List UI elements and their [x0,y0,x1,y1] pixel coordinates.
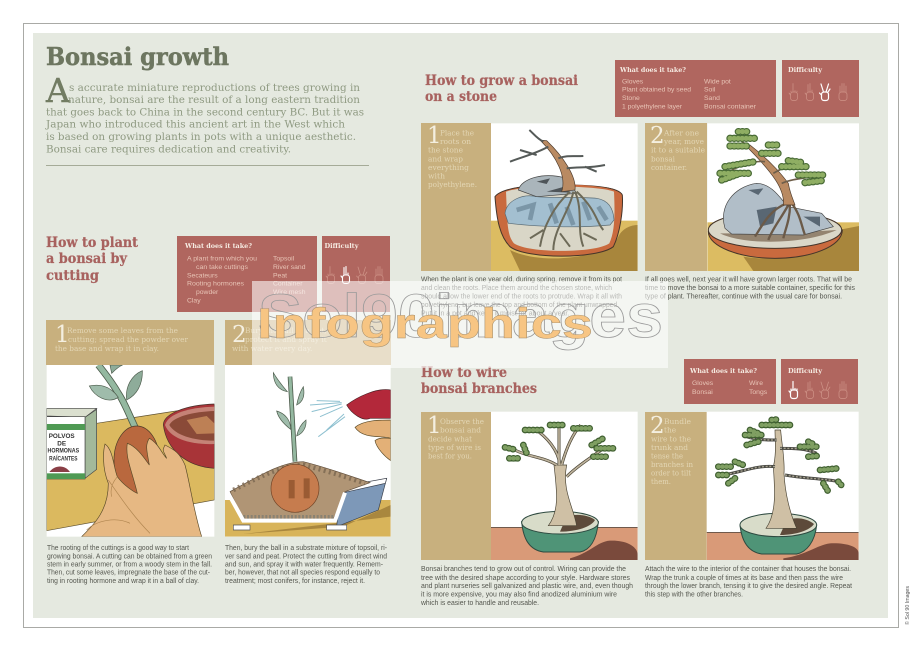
foliage [720,132,825,183]
step 1 caption, wire: decide what [428,434,472,443]
intro text block: is based on growing plants in pots with a unique aesthetic. [46,131,356,143]
powder box: POLVOS [49,433,75,440]
pot and soil [227,462,387,530]
trunk and branches [747,145,795,205]
clay ball [114,426,159,494]
step 2 caption, wire: 2 [650,413,665,439]
powder box [47,408,97,479]
body text: cutting step 2: treatment; most conifers, for instance, reject it. [225,578,365,585]
step 1 caption, wire: bonsai and [440,426,481,435]
panel: what does it take, stone [615,60,776,117]
step 2 caption, stone: year, move [663,137,704,146]
step 1 caption, stone: Place the [440,129,474,138]
illustration: hands wrapping cutting in clay [47,365,214,537]
image credit: © Sol 90 Images [904,585,911,625]
heading: how to plant [46,235,139,284]
panel: what does it take, stone: Sand [704,95,720,102]
body text: stone step 1 [421,277,622,317]
panel: what does it take, stone: Wide pot [704,78,731,85]
step 2 caption, cutting [225,320,391,365]
body text: wire step 2: through the lower branch, tensing it to give the desired angle. Repeat [645,583,852,590]
step 1 caption, stone: the stone [428,146,463,155]
body text: wire step 1 [420,566,633,607]
step 1 caption, wire: Observe the [440,417,484,426]
trunk and branches [540,140,575,192]
intro text block: s accurate miniature reproductions of trees growing in [69,82,360,94]
trunk [766,430,797,528]
panel: what does it take, stone: What does it take? [619,66,686,74]
buried clay ball [271,464,319,512]
watermark: Infographics [257,300,593,348]
panel: what does it take, wire: Bonsai [692,389,713,396]
panel: what does it take, cutting: Peat [273,272,287,279]
hands [82,438,202,537]
body text: stone step 2 [645,277,855,301]
intro text block: nature, bonsai are the result of a long eastern tradition [68,94,360,106]
step 2 caption, wire: Bundle [664,417,691,426]
body text: stone step 1: When the plant is one year old, during spring, remove it from its pot [421,277,622,284]
step 1 caption, cutting [46,320,214,365]
step 1 caption, stone: roots on [440,137,471,146]
heading: grow on a stone: How to grow a bonsai [425,73,578,89]
body text: stone step 1: Put it in a pot and keep it moist for about a year. [421,310,569,317]
step 1 caption, wire: 1 [427,413,442,439]
body text: stone step 2: time to move the bonsai to a more suitable container, specific for this [645,285,855,292]
body text: stone step 2: If all goes well, next year it will have grown larger roots. That will be [645,277,852,284]
step 2 caption, wire: tense the [651,452,683,461]
intro text block: Japan who introduced this ancient art in the West which [45,119,345,131]
step 2 caption, cutting: Bury the ball in a pot, [245,326,327,335]
heading: how to plant: a bonsai by [46,251,128,267]
illustration: planted cutting being sprayed [225,365,391,537]
intro text block [45,71,364,155]
step 2 caption, wire: them. [651,477,671,486]
roots [530,192,603,250]
body text: cutting step 1: Then, cut some leaves, impregnate the base of the cut- [47,570,211,577]
step 1 caption, cutting: Remove some leaves from the [67,326,178,335]
panel: what does it take, cutting: can take cuttings [196,264,249,271]
heading: grow on a stone [425,73,578,105]
step 2 caption, cutting: 2 [232,322,247,348]
step 2 caption, stone: bonsai [651,154,676,163]
stone [723,183,833,235]
panel: what does it take, cutting: Topsoil [273,256,295,263]
panel: what does it take, cutting: powder [196,289,219,296]
panel: what does it take, stone: Gloves [622,78,644,85]
powder box: DE [57,440,66,447]
body text: stone step 1: should allow the lower end of the roots to protrude. Wrap it all with [421,294,622,301]
powder box: HORMONAS [47,448,79,455]
step 2 caption, wire: branches in [651,460,693,469]
foliage [505,425,615,458]
heading: how to plant: cutting [46,268,100,284]
wired branches [723,437,840,482]
step 1 caption, stone: and wrap [428,154,463,163]
body text: cutting step 1 [47,545,212,585]
panel: difficulty, wire: Difficulty [788,367,823,375]
step 1 caption, stone [421,123,491,271]
body text: cutting step 2: ver sand and peat. Protect the cutting from direct wind [225,553,387,560]
heading: wire branches [421,365,537,397]
step 2 caption, cutting: protect it and spray it [245,335,327,344]
trunk [548,465,577,526]
roots [755,203,805,240]
panel: what does it take, cutting: Rooting hormones [187,281,245,288]
panel: difficulty, cutting: Difficulty [324,242,360,250]
panel: difficulty, cutting [322,236,390,312]
panel: what does it take, stone: Plant obtained by seed [622,87,691,94]
step 2 caption, wire: order to tilt [651,469,691,478]
step 2 caption, stone [645,123,707,271]
step 2 caption, wire: trunk and [651,443,688,452]
body text: stone step 2: type of plant. Thereafter, continue with the usual care for bonsai. [645,294,842,301]
step 2 caption, stone: 2 [650,123,665,149]
step 2 caption, wire: wire to the [651,434,691,443]
tray [708,230,842,258]
bowl [163,404,214,468]
body text: cutting step 1: stem in early summer, or from a woody stem in the fall. [47,562,212,568]
plant [273,373,306,462]
body text: cutting step 1: growing bonsai. A cutting can be obtained from a green [47,553,212,560]
powder box: RAÍCANTES [49,454,77,463]
illustration: bonsai on stone in tray [707,123,859,271]
pot [522,522,598,552]
foliage [718,419,843,492]
body text: cutting step 2: and sun, and spray it with water frequently. Remem- [225,562,384,568]
panel: what does it take, cutting: What does it take? [184,242,252,250]
body text: wire step 2: Wrap the trunk a couple of times at its base and then pass the wire [645,575,843,582]
heading: grow on a stone: on a stone [425,89,497,105]
panel: difficulty, wire [781,359,858,404]
illustration: wired bonsai [707,412,859,560]
body text: stone step 1: and clean the roots. Place them around the chosen stone, which [421,285,612,292]
title: Bonsai growth [46,42,229,71]
step 2 caption, wire [645,412,707,560]
intro text block: Bonsai care requires dedication and creativity. [46,143,291,155]
panel: what does it take, wire: Gloves [692,380,714,387]
cutting [89,365,142,431]
body text: wire step 2: this step with the other branches. [645,592,743,599]
step 2 caption, stone: After one [663,129,699,138]
illustration: bonsai before wiring [491,412,638,560]
step 2 caption, stone: it to a suitable [651,146,705,155]
intro text block: that goes back to China in the second century BC. But it was [46,106,364,118]
panel: what does it take, stone: Bonsai container [704,104,757,111]
body text: cutting step 1: The rooting of the cuttings is a good way to start [47,545,189,552]
panel: what does it take, cutting [177,236,317,312]
panel: what does it take, wire: Wire [749,380,763,387]
spray bottle and hand [347,390,391,461]
step 1 caption, stone: polyethylene. [428,180,477,189]
body text: wire step 1: it is more expensive, you may also find anodized aluminium wire [421,592,617,599]
pot [740,525,817,554]
panel: difficulty, stone: Difficulty [788,66,823,74]
body text: cutting step 1: ting in rooting hormone and wrap it in a ball of clay. [47,578,199,585]
panel: what does it take, cutting: Wire mesh [273,289,306,296]
body text: wire step 1: Bonsai branches tend to grow out of control. Wiring can provide the [421,566,626,573]
panel: what does it take, wire [684,359,776,404]
panel: what does it take, cutting: Secateurs [187,272,218,279]
body text: wire step 1: which is easier to handle and reusable. [420,600,539,607]
panel: what does it take, cutting: A plant from which you [187,256,257,263]
body text: wire step 2: Attach the wire to the interior of the container that houses the bonsai. [645,566,851,573]
pot [495,184,623,256]
body text: cutting step 2: Then, bury the ball in a substrate mixture of topsoil, ri- [225,545,388,552]
drop cap: A [45,71,71,110]
step 1 caption, stone: 1 [427,123,442,149]
step 2 caption, wire: the [664,426,676,435]
step 1 caption, cutting: the base and wrap it in clay. [55,344,159,353]
panel: difficulty, stone [782,60,859,117]
step 1 caption, stone: with [428,171,445,180]
panel: what does it take, stone: Stone [622,95,640,102]
panel: what does it take, stone: 1 polyethylene layer [622,104,683,111]
body text: cutting step 2: ber, however, that not all species respond equally to [225,570,380,577]
spray [310,401,345,437]
body text: stone step 1: polyethylene, but leave the top and bottom of the plant unwrapped. [421,302,619,309]
body text: wire step 1: and plant nurseries sell galvanized and plastic wire, and, even though [421,583,633,590]
body text: cutting step 2 [225,545,388,585]
panel: what does it take, stone: Soil [704,87,716,94]
stone [505,196,614,227]
body text: wire step 2 [645,566,852,599]
step 2 caption, stone: container. [651,163,687,172]
panel: what does it take, cutting: Clay [187,297,201,304]
illustration: roots wrapped on stone in pot [491,123,638,271]
panel: what does it take, cutting: River sand [273,264,306,271]
heading: wire branches: How to wire [421,365,507,381]
heading: how to plant: How to plant [46,235,139,251]
step 2 caption, cutting: with water every day. [232,344,312,353]
panel: what does it take, wire: What does it take? [689,367,757,375]
step 1 caption, cutting: 1 [55,322,70,348]
watermark: Sol90images [258,282,663,350]
panel: what does it take, cutting: Container [273,281,303,288]
body text: wire step 1: tree with the desired shape according to your style. Hardware stores [421,575,630,582]
step 1 caption, stone: everything [428,163,469,172]
panel: what does it take, wire: Tongs [749,389,768,396]
step 1 caption, wire [421,412,491,560]
heading: wire branches: bonsai branches [421,381,537,397]
step 1 caption, wire: best for you. [428,452,472,461]
step 1 caption, wire: type of wire is [428,443,481,452]
step 1 caption, cutting: cutting; spread the powder over [68,335,188,344]
